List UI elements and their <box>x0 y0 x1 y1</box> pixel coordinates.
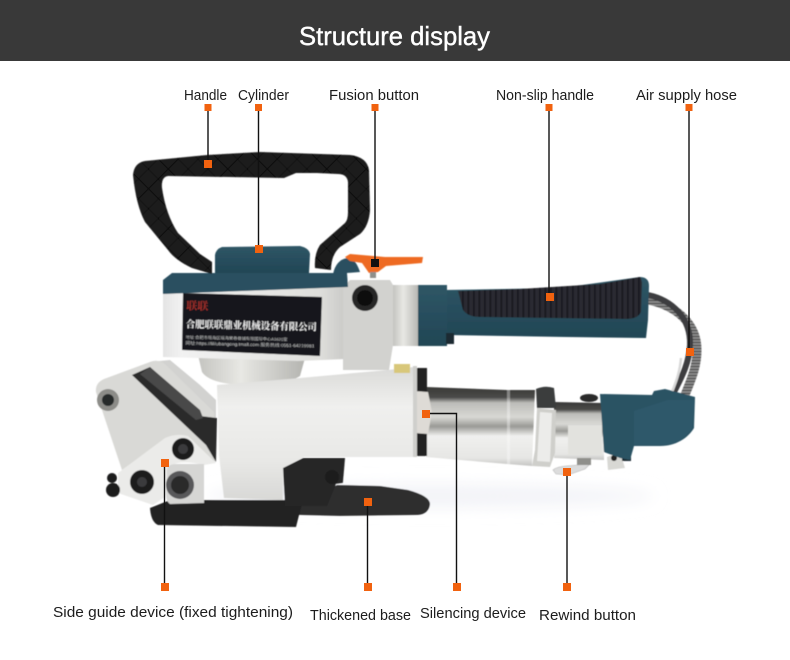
pivot bolt <box>97 389 119 411</box>
icon: air supply hose <box>648 295 697 395</box>
marker <box>563 468 571 591</box>
swing arm <box>96 360 217 470</box>
carry handle <box>133 152 370 274</box>
label: Air supply hose: Air supply hose <box>636 88 737 104</box>
muffler and fins <box>394 364 432 457</box>
marker <box>546 104 554 301</box>
leader line: Air supply hose <box>686 104 694 356</box>
marker <box>686 104 694 356</box>
fusion lever <box>333 254 423 278</box>
leader line: Fusion button <box>371 104 379 267</box>
title: Structure display <box>299 21 490 51</box>
marker <box>204 104 212 168</box>
nameplate: 网址:https://lililubangong.tmall.com 服务热线:0551-64219981 <box>185 340 315 349</box>
marker <box>255 104 263 253</box>
leader line: Non-slip handle <box>546 104 554 301</box>
under-body disc <box>198 355 305 385</box>
label: Side guide device: Side guide device (fixed tightening) <box>53 605 293 621</box>
upper body housing <box>163 280 393 370</box>
leader line: Silencing device <box>422 410 461 591</box>
nameplate: 合肥联联鼎业机械设备有限公司 <box>186 318 317 334</box>
side guide device <box>106 435 216 505</box>
header banner <box>0 0 790 61</box>
marker <box>364 498 372 591</box>
label: Thickened base: Thickened base <box>310 608 411 624</box>
lower cast body <box>217 367 416 500</box>
label: Silencing device: Silencing device <box>420 606 526 622</box>
label: Fusion button: Fusion button <box>329 88 419 104</box>
marker <box>161 459 169 591</box>
rear elbow <box>600 389 695 460</box>
leader line: Side guide device <box>161 459 169 591</box>
marker <box>371 104 379 267</box>
label: Cylinder: Cylinder <box>238 88 289 104</box>
ground shadow <box>205 485 655 507</box>
label: Handle: Handle <box>184 88 227 104</box>
leader line: Thickened base <box>364 498 372 591</box>
product photo: pneumatic strapping tool <box>96 152 697 527</box>
label: Non-slip handle: Non-slip handle <box>496 88 594 104</box>
icon: rewind button <box>553 446 631 475</box>
nameplate: 地址:合肥市瑶海区瑶海果巷巷铺有限国际中心A1620室 <box>186 334 288 342</box>
leader line: Handle <box>204 104 212 168</box>
non-slip grip <box>445 277 649 338</box>
piston tube <box>426 387 604 467</box>
marker <box>422 410 461 591</box>
teal top plate <box>163 273 348 294</box>
base foot <box>150 458 430 527</box>
leader line: Cylinder <box>255 104 263 253</box>
label: Rewind button: Rewind button <box>539 608 636 624</box>
collar and neck <box>393 285 454 346</box>
locking collar <box>532 387 556 467</box>
nameplate: 联联 <box>186 299 208 313</box>
air inlet port <box>352 285 378 311</box>
leader line: Rewind button <box>563 468 571 591</box>
cylinder cap <box>215 246 310 273</box>
nameplate <box>182 293 322 356</box>
